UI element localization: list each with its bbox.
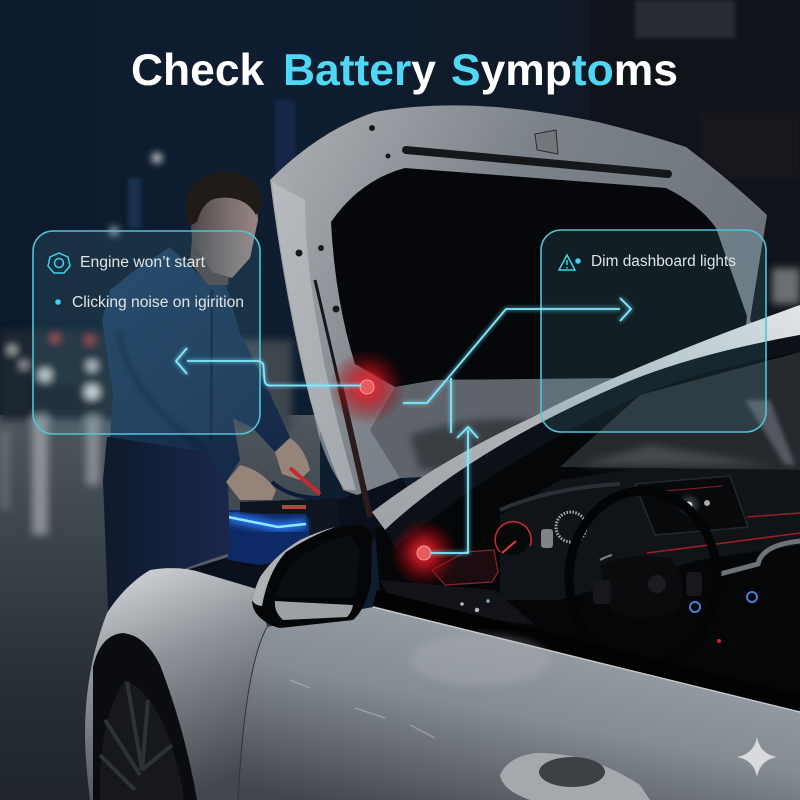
- side mirror: [252, 525, 372, 628]
- panel: engine symptoms: [33, 231, 260, 434]
- icon: sparkle watermark: [737, 737, 777, 777]
- red marker: engine fault: [329, 349, 405, 425]
- text: clicking noise: Clicking noise on igirition: [72, 294, 244, 311]
- battery with neon strip: [228, 482, 340, 565]
- panel: dashboard symptoms: [541, 230, 766, 432]
- text: dim dashboard lights: Dim dashboard lights: [591, 253, 736, 270]
- bullet: [55, 299, 61, 305]
- car body: door: [238, 598, 800, 800]
- dashboard top: [500, 468, 800, 600]
- text: engine won't start: Engine won’t start: [80, 254, 206, 271]
- mechanic hair: [185, 172, 263, 226]
- hood support strut: [315, 280, 370, 517]
- mechanic trousers: [103, 437, 230, 610]
- center display: [541, 529, 553, 548]
- infotainment screen: [635, 476, 748, 535]
- red marker: dashboard fault: [390, 519, 458, 587]
- icon: warning triangle: [559, 255, 575, 270]
- mechanic neck: [190, 240, 232, 285]
- arrow: up from dashboard marker: [431, 427, 478, 553]
- mechanic hands: [226, 465, 276, 500]
- door handle: [500, 753, 650, 800]
- engine bay: [157, 470, 420, 592]
- open car hood: [270, 105, 800, 495]
- speedometer gauge: [495, 521, 531, 555]
- hood seal strip: [406, 150, 668, 174]
- front wheel rim: [100, 680, 184, 800]
- rev gauge: [556, 512, 586, 542]
- air vent: [432, 550, 498, 585]
- windshield and car interior: [375, 345, 800, 700]
- windshield pillar and roof: [372, 305, 800, 548]
- arrow: to dashboard panel: [403, 298, 631, 433]
- steering wheel: [569, 491, 717, 665]
- mirror silver cap: [252, 527, 335, 606]
- view through windshield: [560, 352, 800, 470]
- bullet: [575, 258, 581, 264]
- title: Batter: [283, 46, 411, 95]
- mechanic placket: [211, 290, 212, 440]
- mirror glass: [275, 535, 360, 597]
- hood lower crossmember: [370, 376, 800, 478]
- hood latch: [535, 130, 558, 154]
- icon: engine hexagon: [48, 253, 70, 273]
- arrow: to engine panel: [176, 348, 361, 386]
- red accent trim: [647, 513, 800, 553]
- red clamp: [290, 468, 320, 494]
- mechanic torso and sleeve: [102, 247, 290, 482]
- title: Check: [131, 46, 265, 95]
- title: S: [451, 46, 481, 95]
- hood black liner: [331, 168, 747, 387]
- climate knobs: [690, 602, 700, 612]
- mechanic face: [190, 190, 258, 278]
- silver dash trim: [720, 541, 800, 574]
- mechanic sleeve fold: [118, 330, 207, 450]
- title: y: [411, 46, 436, 95]
- car body: fender: [85, 568, 267, 800]
- mechanic: [102, 172, 320, 610]
- lower console: [380, 580, 535, 625]
- mirror lower reflection: [275, 601, 353, 620]
- title: ymptoms: [481, 46, 678, 95]
- wheel arch: [93, 633, 197, 800]
